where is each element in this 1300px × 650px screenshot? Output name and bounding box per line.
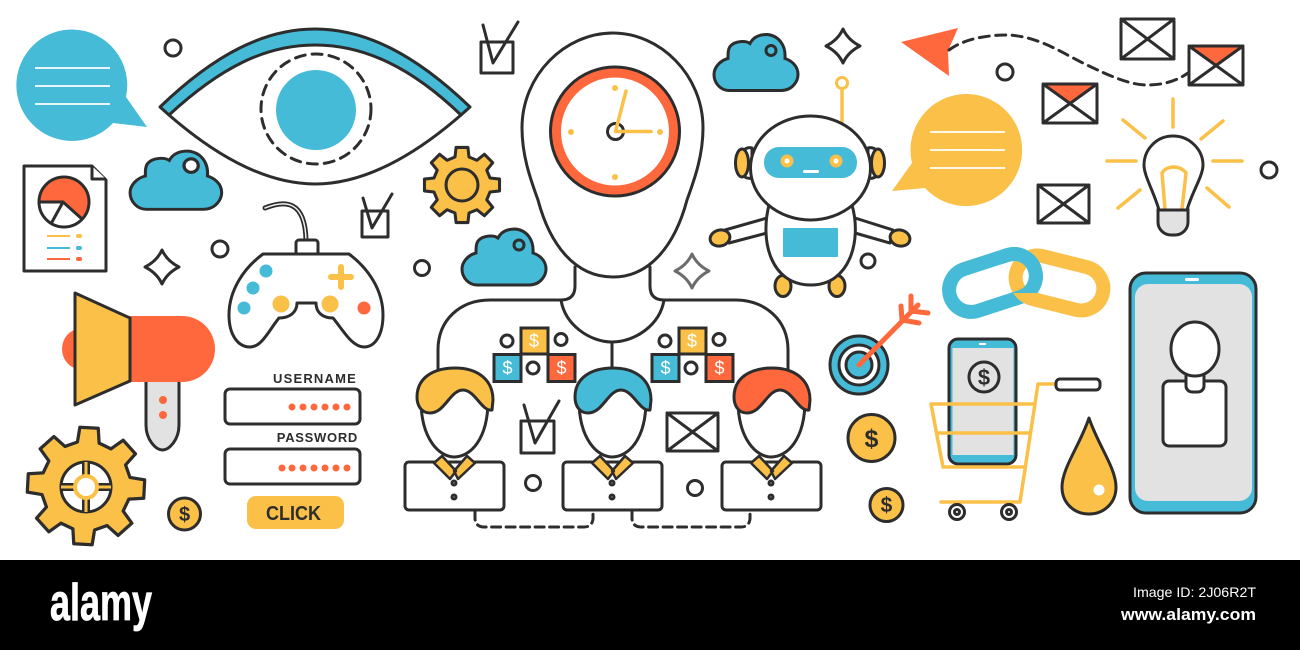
icon: sparkle top: [826, 29, 860, 63]
icon: coin bottom left: [168, 498, 200, 530]
icon: envelope top: [1121, 19, 1174, 59]
person: orange hair: [722, 368, 821, 510]
icon: yellow speech bubble: [892, 94, 1022, 206]
icon: orange envelope top right: [1189, 46, 1243, 85]
person: yellow hair: [405, 368, 504, 510]
click button: [247, 496, 344, 529]
password field: [225, 449, 360, 484]
icon: blue speech bubble: [16, 29, 147, 141]
icon: sparkle left: [145, 250, 179, 284]
dollar blocks right: $: [714, 358, 725, 378]
website: www.alamy.com: [1120, 605, 1256, 624]
icon: coin large: [848, 414, 895, 462]
central head with clock: [522, 33, 703, 277]
dashed flight path: [949, 35, 1188, 85]
icon: light bulb: [1107, 99, 1242, 235]
icon: envelope centre: [667, 413, 718, 451]
icon: check box left: [362, 194, 392, 237]
icon: yellow drop: [1062, 418, 1116, 514]
image id: Image ID: 2J06R2T: [1133, 584, 1256, 600]
dollar blocks left: $: [502, 358, 513, 378]
icon: cloud left: [130, 151, 222, 209]
icon: coin small: [870, 488, 903, 522]
organisation connector lines: [438, 267, 788, 527]
person: blue hair: [563, 368, 662, 510]
dollar blocks left: [494, 328, 575, 382]
dollar blocks right: $: [687, 331, 697, 351]
dollar blocks left: $: [529, 331, 539, 351]
icon: envelope lower: [1038, 185, 1089, 223]
small ring decorations: [165, 40, 1277, 496]
clock: [550, 67, 680, 196]
icon: smartphone with dollar: [949, 339, 1016, 464]
icon: orange envelope middle: [1043, 84, 1097, 123]
dollar blocks left: $: [556, 358, 567, 378]
login form: [225, 371, 360, 529]
icon: megaphone: [62, 293, 215, 450]
icon: small gear: [424, 147, 500, 223]
alamy logo: alamy: [50, 574, 152, 632]
icon: coin bottom left: $: [179, 504, 190, 526]
icon: sparkle centre: [675, 254, 709, 288]
click button: CLICK: [266, 503, 321, 525]
icon: coin large: $: [865, 425, 879, 453]
icon: coin small: $: [881, 494, 893, 517]
dollar blocks right: $: [660, 358, 671, 378]
icon: cloud centre: [462, 229, 546, 285]
icon: robot: [708, 78, 912, 296]
icon: game controller: [229, 204, 383, 347]
username field: [225, 389, 360, 424]
username label: USERNAME: [273, 371, 357, 386]
icon: large phone with user profile: [1130, 273, 1256, 513]
icon: cloud right: [714, 34, 798, 90]
icon: check box bottom: [521, 401, 559, 453]
icon: target with arrow: [830, 296, 928, 394]
footer bar: [0, 560, 1300, 650]
icon: shopping cart: [931, 379, 1100, 520]
password label: PASSWORD: [277, 430, 358, 445]
icon: smartphone with dollar: $: [978, 365, 990, 390]
icon: paper plane: [901, 28, 958, 76]
icon: report document with pie chart: [24, 166, 106, 271]
dollar blocks right: [652, 328, 733, 382]
icon: chain links: [943, 248, 1108, 318]
icon: check box top: [481, 22, 518, 73]
icon: large gear: [25, 425, 147, 547]
icon: eye: [160, 29, 470, 184]
